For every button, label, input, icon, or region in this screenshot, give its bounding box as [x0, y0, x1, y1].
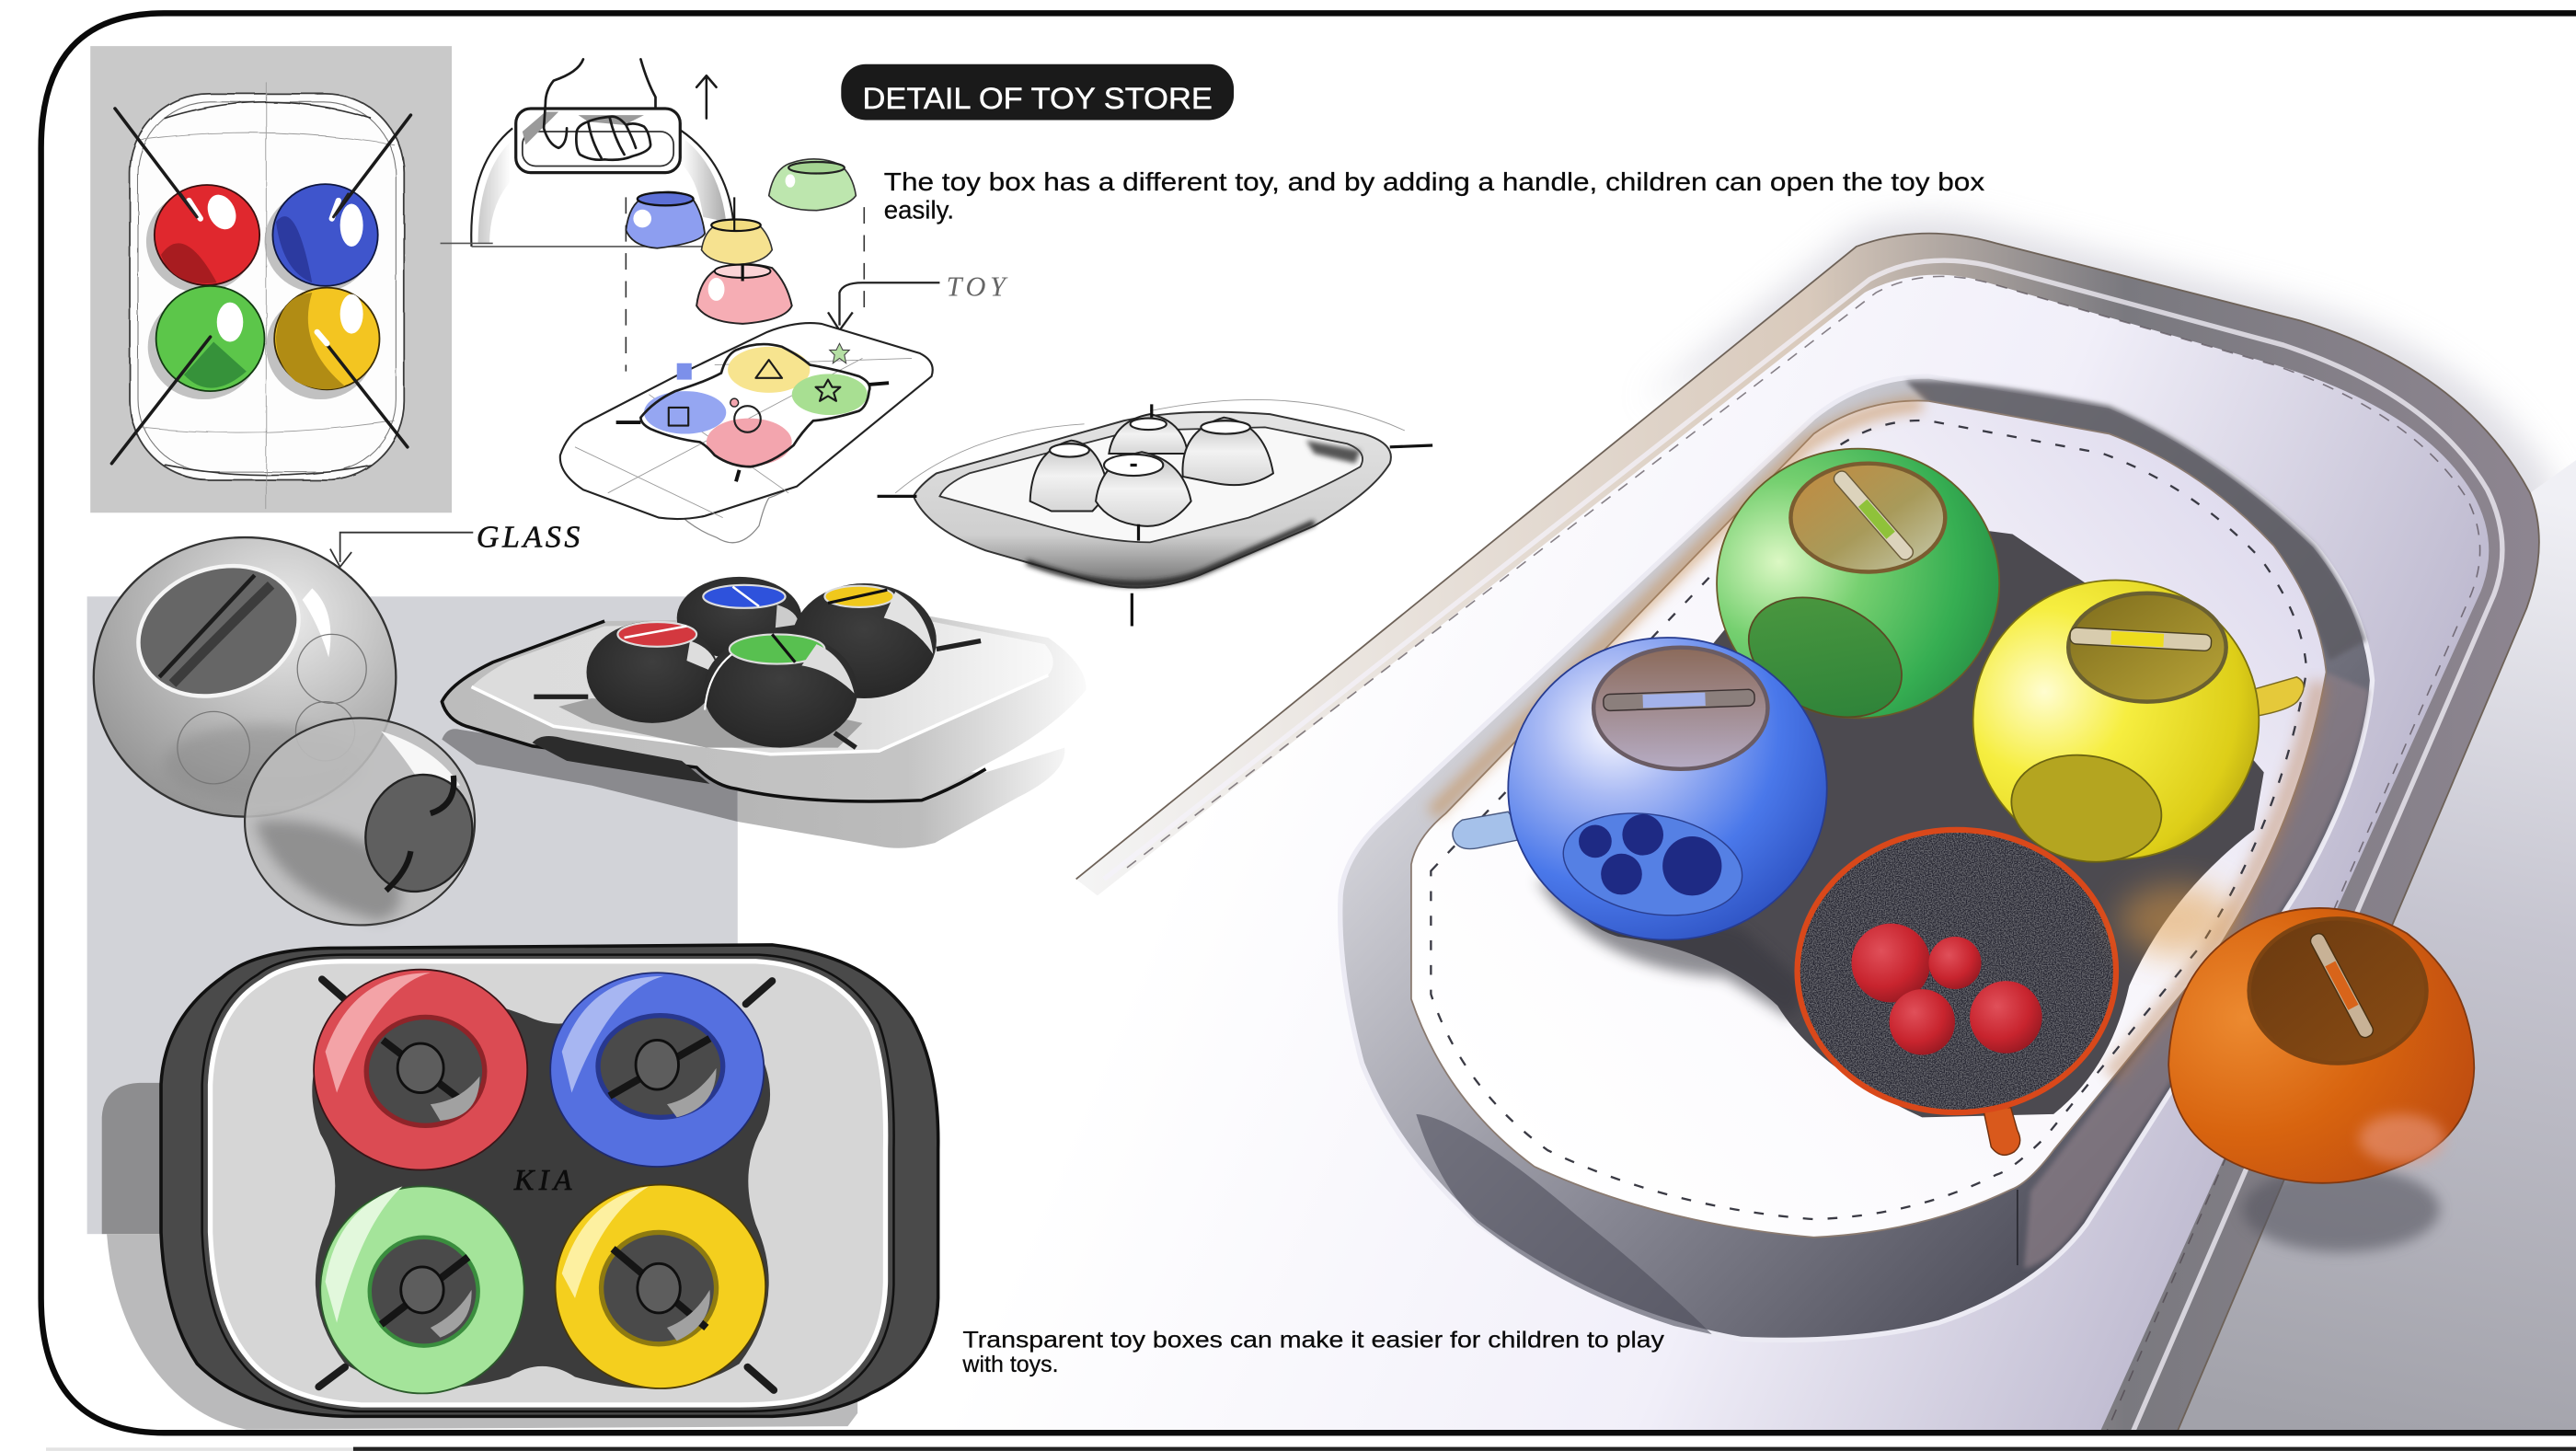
stitching	[1431, 420, 2306, 1219]
rim shading	[1027, 523, 1315, 584]
shadow of orange dome	[2243, 1167, 2440, 1252]
tab: yellow	[2250, 677, 2304, 717]
surface of the table	[1289, 274, 2490, 1430]
well outline	[640, 344, 869, 466]
tray inner	[939, 427, 1363, 542]
spikes	[616, 383, 889, 481]
sphere: blue	[1508, 638, 1827, 940]
tray outline	[442, 621, 985, 801]
cups	[1030, 414, 1273, 526]
tab: orange	[1983, 1108, 2020, 1155]
panel: large render of toy store tray	[920, 217, 2576, 1433]
cup: pink	[696, 264, 792, 324]
surface edge line	[202, 955, 894, 1411]
yellow handle	[2070, 628, 2212, 651]
ring seam	[2017, 1190, 2018, 1265]
KIA logo: KIA	[513, 1163, 572, 1196]
dark four lobed base	[1587, 531, 2264, 1117]
tray edge highlight	[471, 675, 1048, 754]
green base circle	[1748, 596, 1903, 718]
ball shadows	[146, 190, 374, 399]
plate shadow upper	[102, 1083, 213, 1234]
ring: yellow	[556, 1185, 765, 1388]
dark lobed base	[312, 996, 770, 1388]
sketch: tray with coloured wells	[560, 323, 933, 543]
inner white panel	[1411, 401, 2327, 1238]
label: TOY	[828, 271, 1008, 330]
outer dark tray	[161, 945, 938, 1416]
shadow beneath the spheres	[1536, 879, 1807, 1019]
sketch: tray with black spheres	[442, 577, 1086, 848]
well symbols	[669, 360, 840, 426]
inner ring of the tray	[1340, 376, 2373, 1340]
grey backdrop	[90, 46, 452, 512]
inner silver surface	[211, 962, 886, 1405]
dashed guide lines	[626, 197, 864, 372]
mauve right segment of ring	[2024, 672, 2369, 1269]
ball: red	[155, 185, 259, 285]
cup: yellow	[701, 197, 772, 265]
warm glow lower right	[2111, 682, 2319, 1077]
highlight	[381, 731, 460, 789]
yellow base circle	[2003, 743, 2170, 873]
slots	[386, 776, 454, 891]
text block: transparent toy boxes: Transparent toy boxes can make it easier for children to play	[962, 1327, 1664, 1353]
handle hatching	[523, 112, 644, 144]
outer band	[1076, 234, 2539, 1433]
slot	[159, 575, 255, 677]
shadow below tray on white	[738, 748, 1064, 848]
body ghost	[640, 395, 868, 543]
ground shadow on tray	[558, 698, 863, 748]
sketch: glass spheres	[94, 521, 580, 925]
sphere: yellow	[1973, 580, 2259, 873]
blue base circle with toys	[1555, 800, 1750, 928]
inner circles	[178, 634, 366, 784]
plate with red balls	[1798, 830, 2116, 1112]
ball: blue	[272, 184, 378, 286]
cup openings	[1050, 419, 1250, 476]
panel: top view sketch on grey	[90, 46, 452, 512]
outer band highlights	[1076, 234, 2539, 1433]
leader arrow	[828, 282, 939, 330]
handwritten text: TOY	[947, 271, 1008, 303]
sketch: KIA top view tray	[102, 945, 938, 1430]
small sphere window	[350, 760, 489, 906]
cup: blue	[626, 192, 705, 248]
soft shadow around outer band	[1669, 207, 2558, 493]
front recess	[533, 736, 709, 784]
big glass sphere	[94, 537, 396, 817]
highlight on orange dome	[2359, 1114, 2444, 1163]
blue window	[1593, 648, 1767, 769]
tab: blue	[1453, 812, 1528, 849]
fabric plate	[1799, 832, 2114, 1111]
pill	[841, 64, 1234, 120]
GLASS text: GLASS	[477, 521, 580, 555]
black sphere: green	[703, 633, 857, 748]
small glass sphere	[245, 718, 489, 925]
tray outline	[130, 82, 404, 510]
orange dome	[2168, 908, 2474, 1183]
black sphere: red	[587, 621, 718, 723]
orange window	[2249, 918, 2427, 1063]
tray body	[560, 323, 933, 519]
wells	[644, 347, 868, 466]
plate shadow lower	[107, 1234, 857, 1430]
heading pill	[841, 64, 1234, 120]
tray body side	[442, 616, 1086, 801]
panel: grey backdrop for lower sketches	[87, 596, 738, 1234]
bottom strip	[46, 1447, 2576, 1451]
right side surface	[2177, 460, 2576, 1433]
ball: yellow	[274, 288, 379, 389]
sphere: green	[1717, 449, 1999, 741]
lower shading	[255, 820, 401, 920]
text block: transparent toy boxes: with toys.	[961, 1352, 1059, 1377]
tote shading left	[478, 142, 511, 243]
red balls	[1851, 924, 1930, 1002]
black sphere: blue	[677, 577, 801, 659]
dark handle recess at lower left	[1416, 1114, 1712, 1334]
glass leader	[330, 533, 473, 567]
small toy marks	[677, 343, 849, 432]
handle	[516, 109, 680, 173]
warm glow by orange dome	[2120, 884, 2235, 956]
blue handle	[1604, 689, 1754, 711]
ring: blue	[550, 973, 764, 1167]
ring: red	[314, 970, 527, 1170]
tray outer	[914, 412, 1391, 588]
top right shading	[1306, 441, 1361, 464]
text block: toy box description: easily.	[884, 196, 954, 225]
spike marks	[534, 641, 981, 748]
dark top segment of ring	[1905, 381, 2365, 661]
ring: green	[320, 1186, 524, 1393]
big sphere window	[120, 545, 317, 718]
sticks	[111, 109, 410, 464]
grid lines	[575, 358, 912, 518]
shadow below tray on backdrop	[442, 729, 738, 822]
hand	[544, 59, 655, 160]
handle inner opening	[523, 132, 673, 166]
orange handle	[2308, 931, 2375, 1040]
sketch: hand lifting lid	[441, 59, 734, 247]
highlight crescent	[303, 588, 330, 657]
black sphere: yellow	[792, 583, 937, 698]
tote dome	[471, 128, 734, 247]
text block: toy box description: The toy box has a different toy, and by adding a handle, children can open the toy box	[884, 167, 1984, 196]
yellow window	[2068, 593, 2226, 702]
spikes	[318, 979, 774, 1390]
sketch: perspective tray	[878, 399, 1432, 626]
big sphere lower shade	[165, 725, 362, 803]
green window	[1790, 464, 1945, 572]
faint construction arcs	[895, 399, 1405, 493]
heading text: DETAIL OF TOY STORE	[863, 82, 1213, 115]
plate rim	[1798, 830, 2116, 1112]
up arrow	[696, 75, 717, 119]
base line	[441, 243, 723, 247]
warm glow upper left	[1432, 404, 1922, 813]
green handle	[1831, 468, 1915, 562]
tote shading right	[682, 140, 726, 222]
cup: green	[769, 159, 856, 211]
spikes	[878, 404, 1432, 626]
ball: green	[156, 286, 265, 391]
exploded toy cups	[626, 159, 856, 324]
tray top surface	[471, 621, 1053, 754]
